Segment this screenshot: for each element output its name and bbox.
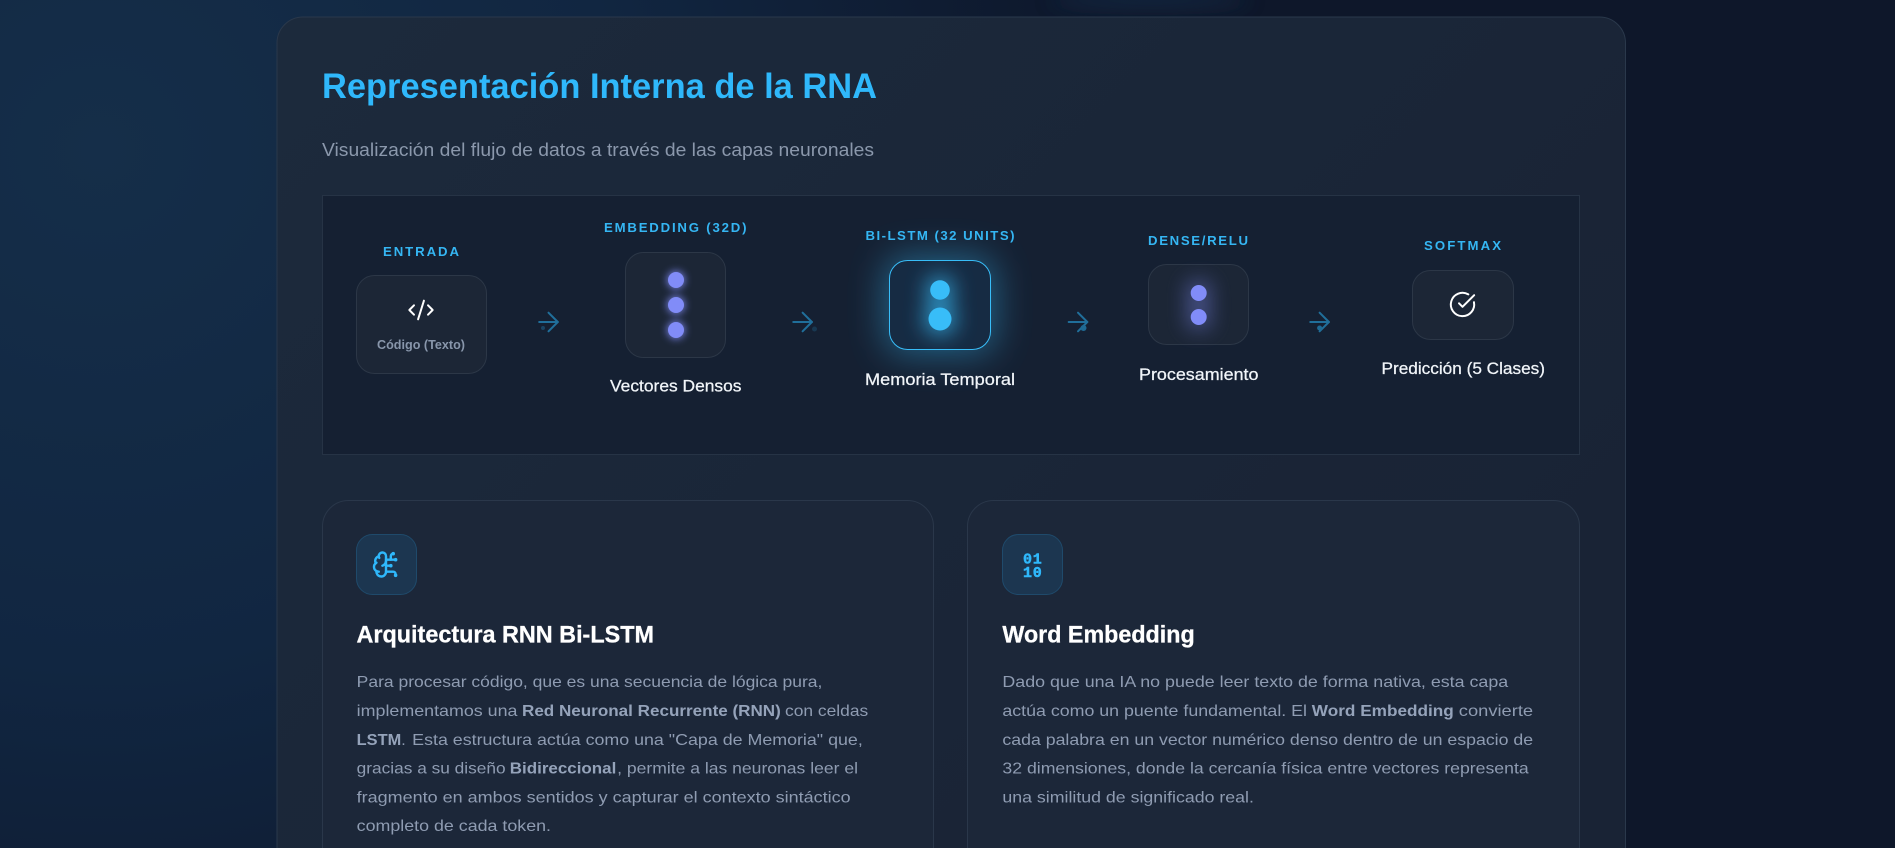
- card body left: completo de cada token.: [357, 818, 551, 835]
- card body right: convierte: [1459, 703, 1533, 720]
- card body left: LSTM: [357, 732, 401, 749]
- card body left: fragmento en ambos sentidos y capturar el contexto sintáctico: [357, 789, 851, 806]
- card body right: una similitud de significado real.: [1002, 789, 1254, 806]
- bi-lstm neurons: [924, 276, 956, 335]
- card body left: implementamos una: [357, 703, 518, 720]
- dense label: DENSE/RELU: [1148, 233, 1248, 248]
- dense box: [1148, 264, 1248, 344]
- icon: check circle: [1451, 293, 1474, 316]
- icon: brain circuit: [356, 534, 416, 594]
- card body right: Dado que una IA no puede leer texto de forma nativa, esta capa: [1002, 674, 1508, 691]
- icon: binary: 01: [1023, 552, 1042, 569]
- arrow 4: [1310, 313, 1329, 331]
- card heading left: Arquitectura RNN Bi-LSTM: [356, 622, 654, 648]
- layer: embedding: [604, 220, 746, 396]
- card body left: con celdas: [785, 703, 868, 720]
- bi-lstm label: BI-LSTM (32 UNITS): [866, 228, 1014, 243]
- softmax box: [1412, 270, 1514, 340]
- softmax label: SOFTMAX: [1424, 238, 1501, 253]
- card body left: Para procesar código, que es una secuencia de lógica pura,: [357, 674, 822, 691]
- icon: binary: 10: [1023, 565, 1042, 582]
- card body right: cada palabra en un vector numérico denso dentro de un espacio de: [1002, 732, 1533, 749]
- card body right: actúa como un puente fundamental. El: [1002, 703, 1307, 720]
- panel: arquitectura rnn bi-lstm: [322, 500, 934, 848]
- layer: softmax: [1382, 238, 1545, 378]
- card body left: Esta estructura actúa como una "Capa de Memoria" que,: [412, 732, 863, 749]
- card body left: [357, 674, 868, 835]
- card body right: 32 dimensiones, donde la cercanía física entre vectores representa: [1002, 761, 1529, 778]
- layer: dense relu: [1139, 233, 1258, 384]
- card body left: Bidireccional: [510, 761, 616, 778]
- card surface right: [968, 500, 1580, 848]
- subtitle: Visualización del flujo de datos a través de las capas neuronales: [322, 140, 874, 160]
- card body right: Word Embedding: [1312, 703, 1454, 720]
- card surface left: [322, 500, 934, 848]
- bi-lstm glow: [885, 256, 995, 354]
- main card surface: [277, 17, 1626, 848]
- card body left: .: [401, 732, 406, 749]
- embedding box: [626, 252, 726, 358]
- icon: code: [409, 301, 433, 319]
- card body left: , permite a las neuronas leer el: [617, 761, 858, 778]
- diagram background: [322, 196, 1580, 454]
- dense caption: Procesamiento: [1139, 366, 1258, 384]
- card body right: [1002, 674, 1533, 806]
- entrada box: [356, 276, 486, 374]
- arrow 3: [1069, 313, 1087, 331]
- card body left: gracias a su diseño: [357, 761, 506, 778]
- title: Representación Interna de la RNA: [322, 66, 877, 106]
- entrada caption: Código (Texto): [377, 337, 465, 352]
- bi-lstm box: [890, 260, 990, 350]
- bi-lstm caption: Memoria Temporal: [865, 371, 1015, 389]
- top glow: [1050, 0, 1250, 6]
- arrow 1: [539, 313, 558, 331]
- embedding neurons: [667, 271, 685, 339]
- layer: bi-lstm: [865, 228, 1015, 389]
- panel: network diagram: [322, 196, 1580, 454]
- panel: main card: [277, 17, 1626, 848]
- panel: word embedding: [968, 500, 1580, 848]
- entrada label: ENTRADA: [383, 244, 459, 259]
- embedding label: EMBEDDING (32D): [604, 220, 746, 235]
- card heading right: Word Embedding: [1002, 622, 1195, 648]
- icon: binary: [1002, 534, 1062, 594]
- arrow 2: [793, 313, 817, 332]
- softmax caption: Predicción (5 Clases): [1382, 360, 1545, 378]
- embedding caption: Vectores Densos: [610, 378, 742, 396]
- layer: entrada: [356, 244, 486, 374]
- dense neurons: [1188, 282, 1210, 328]
- card body left: Red Neuronal Recurrente (RNN): [522, 703, 781, 720]
